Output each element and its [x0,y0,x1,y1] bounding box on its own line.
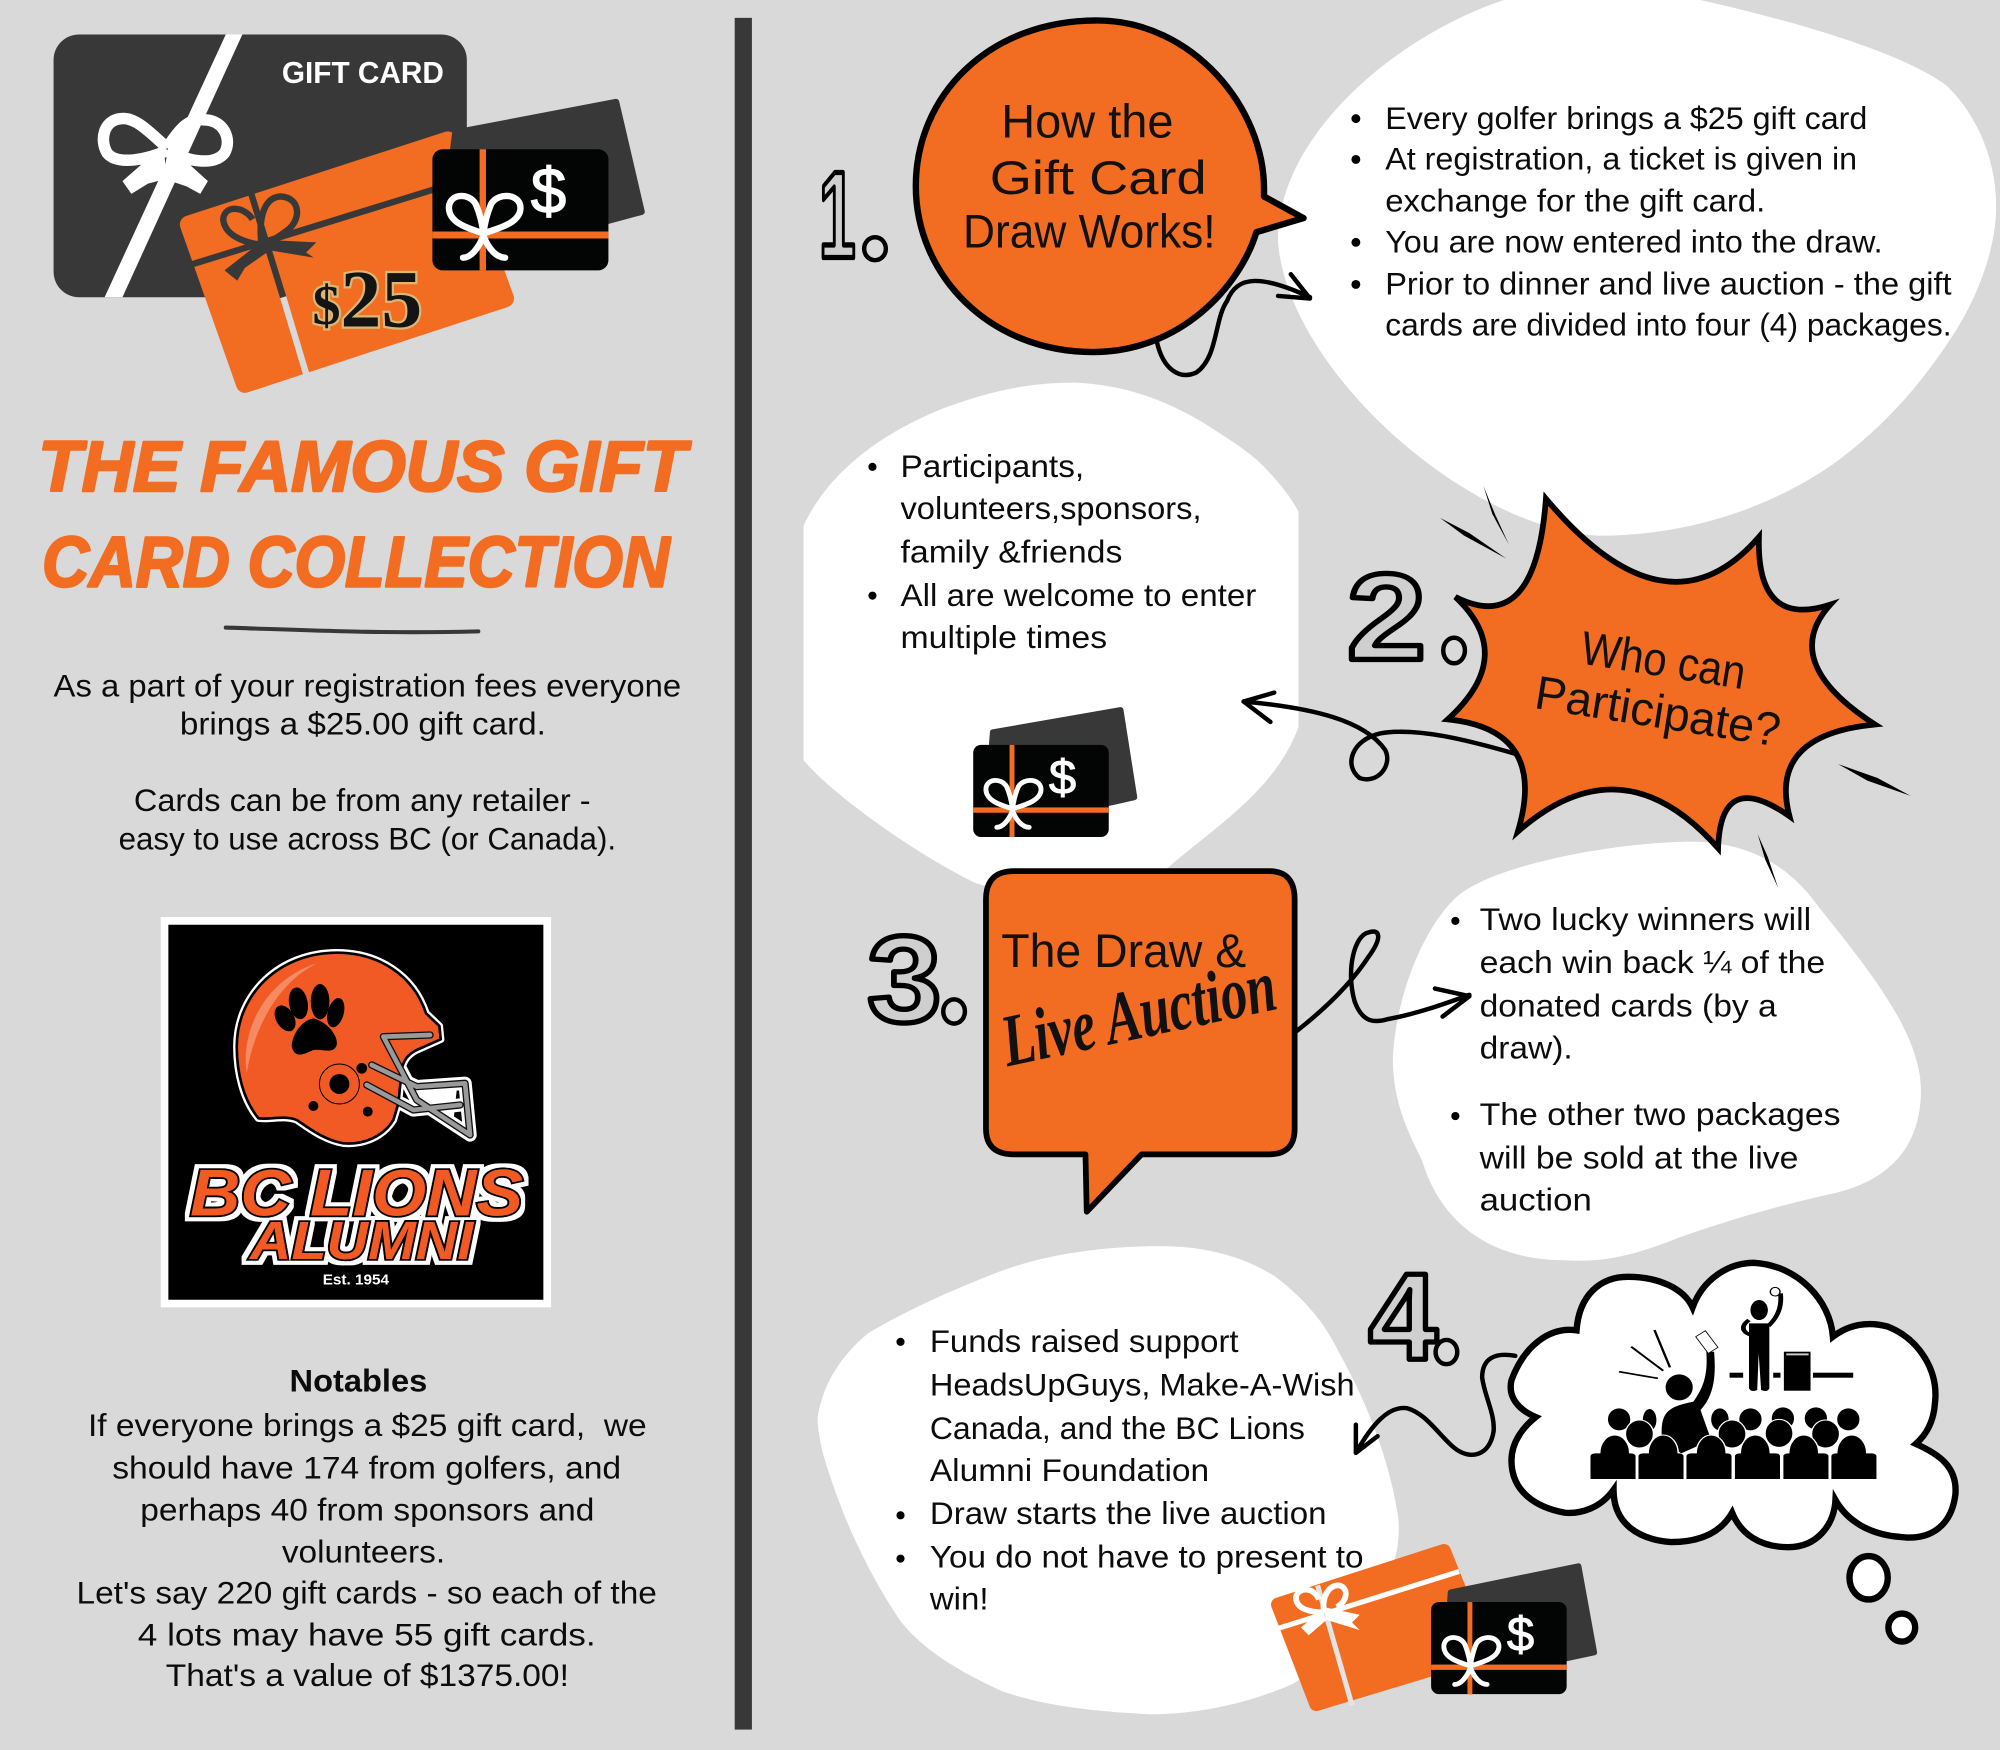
BC Lions Alumni logo [161,917,551,1307]
panel: step 3 text blob: auction [1480,1181,1592,1217]
panel: step 4 text blob: Draw starts the live auction [930,1495,1327,1531]
panel: step 4 text blob: Funds raised support [930,1323,1239,1359]
panel: step 4 text blob: HeadsUpGuys, Make-A-Wish [930,1366,1355,1402]
established year: Est. 1954 [323,1272,390,1288]
helmet [237,953,470,1144]
icon: small gift card, step 2: $ [1049,751,1076,804]
step number 2: 2 [1347,549,1426,686]
panel: step 2 text blob: All are welcome to enter [901,577,1257,613]
intro text: Cards can be from any retailer - [134,782,591,818]
icon: orange gift card, step 4 [1277,1551,1485,1705]
speech box: draw and live auction: The Draw & [1001,925,1246,978]
notables text: 4 lots may have 55 gift cards. [138,1616,596,1652]
intro text [54,667,681,856]
step number 1: 1 [819,147,856,284]
notables text: That's a value of $1375.00! [166,1657,569,1693]
panel: step 2 text blob: Participants, [901,448,1084,484]
auctioneer at podium [1730,1287,1853,1391]
panel: step 4 text blob: Canada, and the BC Lions [930,1410,1305,1446]
small black gift card [432,102,642,270]
title underline [226,628,478,632]
notables text: should have 174 from golfers, and [112,1449,621,1485]
$25 amount: $ [312,275,341,337]
left panel divider bar [735,18,752,1730]
arrow: step 4 [1356,1355,1515,1455]
icon: small gift card, step 4 [1431,1566,1594,1694]
logo wordmark [190,1157,523,1271]
speech bubble: how it works: How the [1001,96,1173,149]
notables text [77,1363,657,1693]
auction audience pictogram [1590,1287,1876,1479]
arrow: step 2 [1244,693,1515,779]
panel: step 2 text blob: volunteers,sponsors, [901,490,1202,526]
panel: step 3 text blob: each win back ¼ of the [1480,944,1825,980]
$25 amount: 25 [341,254,422,345]
title [38,427,692,603]
panel: step 4 text blob: Alumni Foundation [930,1452,1209,1488]
panel: step 4 text blob [818,1246,1399,1714]
panel: step 3 text blob: will be sold at the live [1479,1139,1798,1175]
panel: step 3 text blob [1393,842,1921,1261]
arrow: step 1 [1157,274,1310,375]
intro text: As a part of your registration fees everyone [54,667,681,703]
panel: step 1 text blob: Every golfer brings a $25 gift card [1385,100,1867,136]
starburst: who can participate: Participate? [1531,666,1784,757]
notables text: If everyone brings a $25 gift card, we [88,1407,647,1443]
panel: step 2 text blob [804,383,1298,894]
panel: step 3 text blob: donated cards (by a [1480,988,1777,1024]
panel: step 1 text blob: You are now entered into the draw. [1385,224,1883,260]
panel: step 1 text blob: At registration, a ticket is given in [1385,141,1857,177]
step number 2 [1347,549,1465,686]
speech box: draw and live auction [986,871,1295,1212]
intro text: brings a $25.00 gift card. [180,706,546,742]
speech bubble: how it works: Draw Works! [963,205,1216,258]
burst accent strokes [1440,486,1911,888]
thought bubble with live auction scene [1511,1263,1956,1547]
starburst: who can participate: Who can [1577,622,1749,700]
icon: small gift card, step 2 [973,710,1134,837]
step number 3: 3 [867,911,941,1048]
small black gift card: $ [531,155,566,227]
notables text: volunteers. [282,1533,445,1569]
gift card label: GIFT CARD [282,56,444,90]
panel: step 2 text blob: family &friends [901,533,1122,569]
panel: step 2 text blob: multiple times [901,619,1107,655]
bidder with raised card [1619,1330,1718,1453]
panel: step 4 text blob: win! [929,1581,989,1617]
step number 4: 4 [1369,1249,1438,1386]
thought bubble dots [1849,1556,1915,1642]
title: THE FAMOUS GIFT [38,427,692,507]
starburst: who can participate [1448,499,1875,848]
panel: step 1 text blob: cards are divided into four (4) packages. [1385,306,1952,342]
panel: step 3 text blob: The other two packages [1480,1096,1841,1132]
notables text: Notables [290,1363,427,1399]
dark gift card [54,34,467,297]
panel: step 1 text blob [1278,0,1996,536]
panel: step 3 text blob: draw). [1480,1030,1573,1066]
intro text: easy to use across BC (or Canada). [119,820,616,856]
speech bubble: how it works: Gift Card [990,152,1207,205]
panel: step 4 text blob: You do not have to present to [930,1539,1364,1575]
step number 3 [867,911,965,1048]
orange gift card with $25 [189,140,505,384]
arrow: step 3 [1297,932,1469,1031]
notables text: perhaps 40 from sponsors and [140,1491,594,1527]
panel: step 3 text blob: Two lucky winners will [1480,901,1811,937]
panel: step 1 text blob: Prior to dinner and live auction - the gift [1385,266,1952,302]
title: CARD COLLECTION [42,523,671,603]
paw print [270,984,347,1055]
speech box: draw and live auction: Live Auction [993,945,1283,1083]
logo wordmark: ALUMNI [248,1212,474,1271]
notables text: Let's say 220 gift cards - so each of the [77,1574,657,1610]
gift cards illustration [54,34,642,384]
logo wordmark: BC LIONS [190,1157,523,1231]
speech bubble: how it works [916,20,1304,352]
icon: small gift card, step 4: $ [1507,1608,1534,1661]
panel: step 1 text blob: exchange for the gift card. [1385,183,1765,219]
